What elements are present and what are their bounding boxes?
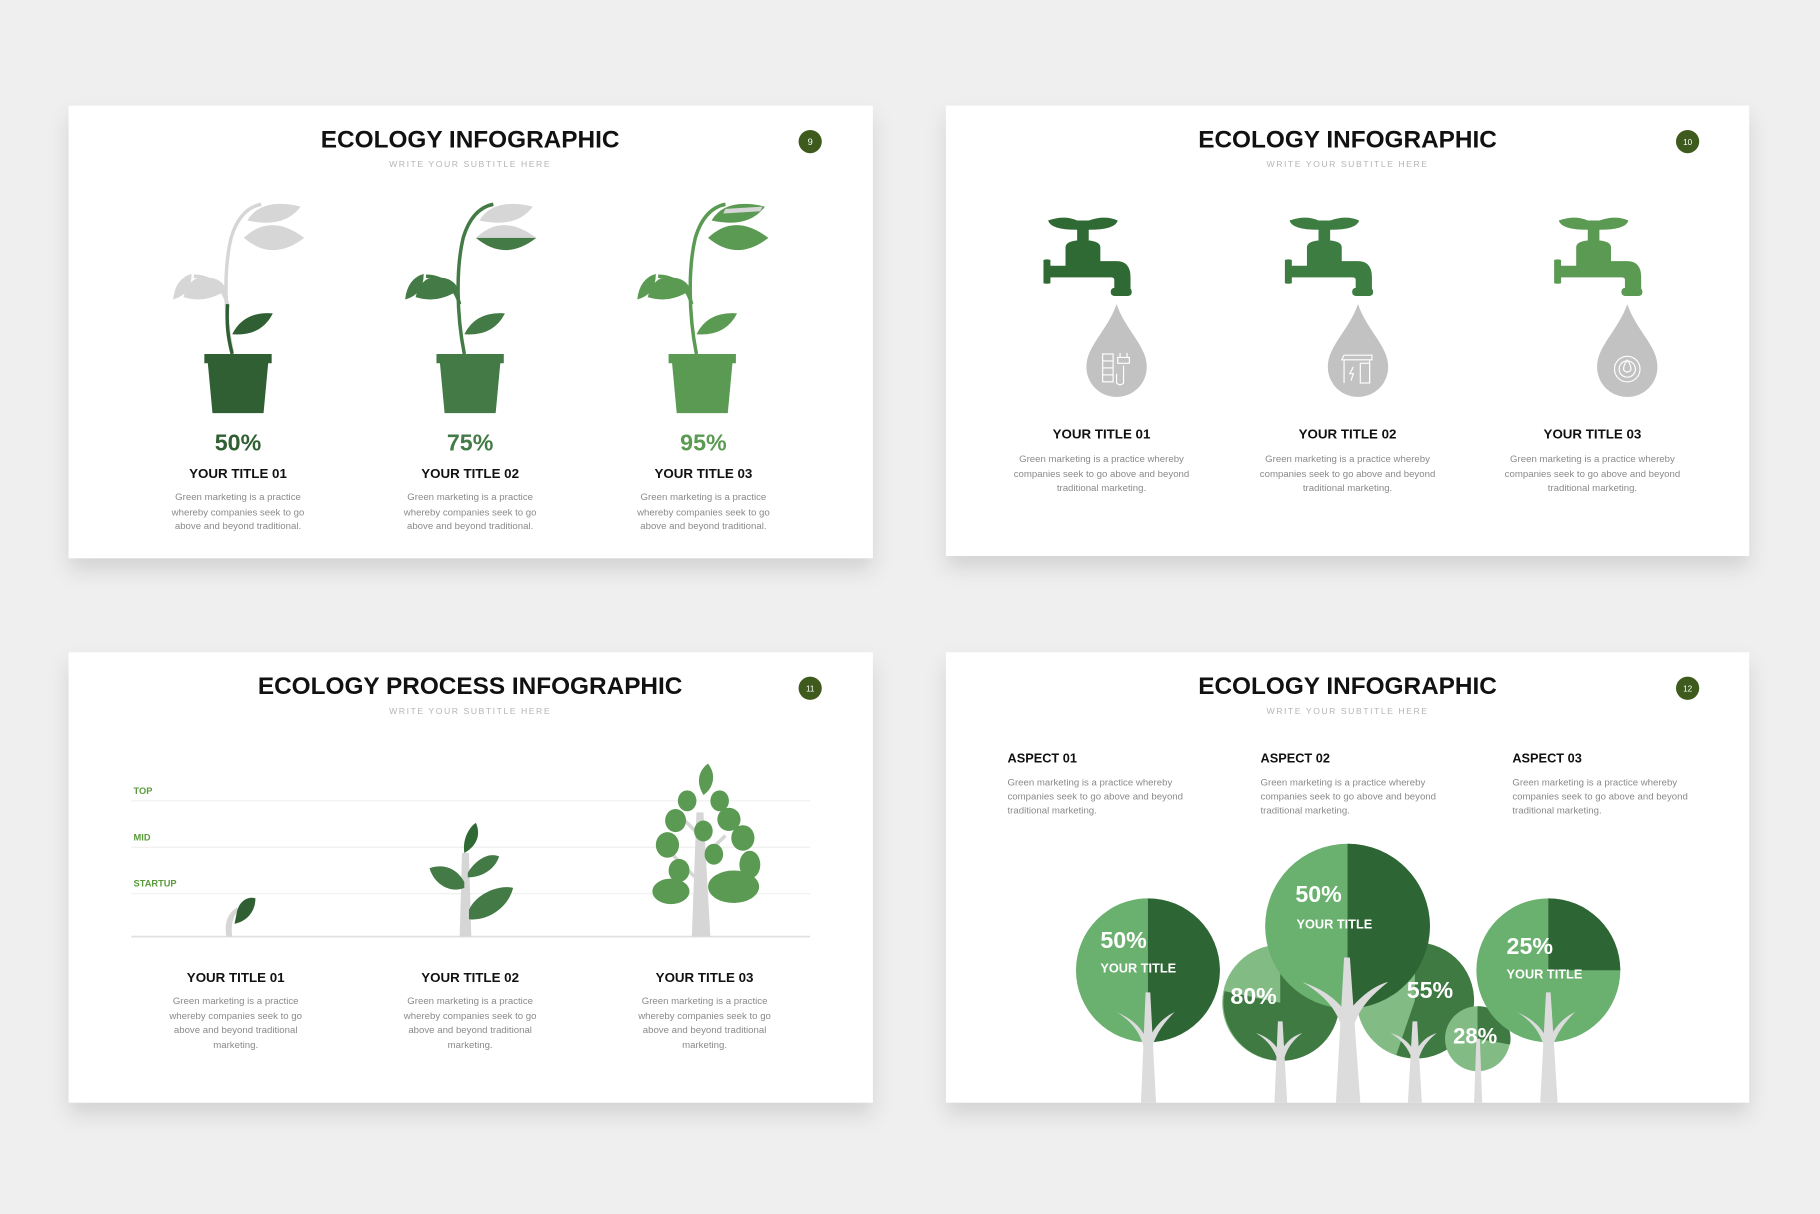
panel: tree pies — [946, 652, 1749, 1103]
stat 1 — [171, 429, 304, 532]
tap texts: YOUR TITLE 02 — [1299, 427, 1396, 442]
subtitle: WRITE YOUR SUBTITLE HERE — [1267, 706, 1429, 716]
plant 1 — [173, 204, 304, 413]
aspects: traditional marketing. — [1512, 806, 1602, 817]
process texts: above and beyond traditional — [408, 1025, 532, 1036]
tree pie 55% — [1357, 942, 1474, 1058]
pie labels: YOUR TITLE — [1296, 916, 1372, 931]
stat 1: 50% — [215, 429, 262, 455]
stat 2: above and beyond traditional. — [407, 521, 533, 532]
sprout 1 — [226, 898, 255, 937]
panel: taps — [946, 106, 1749, 556]
page badge 12: 12 — [1683, 685, 1693, 694]
page badge 9: 9 — [808, 137, 813, 147]
tap texts: traditional marketing. — [1057, 483, 1146, 494]
aspects: traditional marketing. — [1261, 806, 1350, 817]
stat 3: 95% — [680, 429, 727, 455]
tap 1 with drop — [1043, 218, 1147, 397]
pie labels: YOUR TITLE — [1100, 961, 1176, 976]
tree pie 25% — [1476, 898, 1620, 1042]
stat 2: Green marketing is a practice — [407, 492, 533, 503]
pie labels: YOUR TITLE — [1507, 966, 1582, 981]
page badge 9 — [799, 130, 822, 153]
tap texts: traditional marketing. — [1548, 483, 1637, 494]
stat 1: above and beyond traditional. — [175, 521, 301, 532]
tree pie 50% big — [1265, 844, 1430, 1009]
tree pie 80% — [1222, 945, 1339, 1061]
tap 3 with drop — [1554, 218, 1657, 397]
level labels: STARTUP — [134, 879, 177, 889]
tap texts: companies seek to go above and beyond — [1260, 469, 1435, 480]
sprout 2 — [430, 823, 513, 937]
pie labels: 50% — [1100, 927, 1147, 953]
aspects: Green marketing is a practice whereby — [1512, 778, 1677, 789]
level labels — [134, 786, 177, 889]
aspects: traditional marketing. — [1007, 806, 1097, 817]
stat 3: Green marketing is a practice — [641, 492, 766, 503]
process texts: YOUR TITLE 01 — [187, 970, 285, 985]
aspects: ASPECT 01 — [1007, 751, 1077, 766]
page badge 10 — [1676, 130, 1699, 153]
panel: plant growth — [69, 106, 873, 558]
tap texts — [1014, 427, 1680, 494]
level labels: TOP — [134, 786, 152, 796]
aspects — [1007, 751, 1688, 817]
process texts: marketing. — [448, 1040, 493, 1051]
tap texts: traditional marketing. — [1303, 483, 1392, 494]
aspects: Green marketing is a practice whereby — [1007, 778, 1172, 789]
process texts: marketing. — [213, 1040, 258, 1051]
stat 1: whereby companies seek to go — [171, 507, 304, 518]
aspects: Green marketing is a practice whereby — [1261, 778, 1425, 789]
tree pie 28% — [1445, 1006, 1511, 1071]
process texts: Green marketing is a practice — [173, 996, 299, 1007]
panel: process — [69, 652, 873, 1103]
level labels: MID — [134, 832, 151, 842]
pie labels — [1100, 881, 1582, 1048]
pie labels: 28% — [1453, 1023, 1498, 1048]
trunks — [1117, 958, 1575, 1103]
pie labels: 80% — [1230, 983, 1277, 1009]
tap texts: companies seek to go above and beyond — [1014, 469, 1189, 480]
title: ECOLOGY INFOGRAPHIC — [1198, 126, 1497, 153]
tap texts: companies seek to go above and beyond — [1505, 469, 1680, 480]
page badge 10: 10 — [1683, 138, 1693, 147]
process texts: Green marketing is a practice — [407, 996, 533, 1007]
tree 3 — [652, 764, 760, 937]
process texts: whereby companies seek to go — [637, 1011, 771, 1022]
aspects: ASPECT 02 — [1261, 751, 1330, 766]
process texts: whereby companies seek to go — [403, 1011, 536, 1022]
stat 2: YOUR TITLE 02 — [421, 466, 519, 481]
stat 2: 75% — [447, 429, 494, 455]
subtitle: WRITE YOUR SUBTITLE HERE — [1267, 159, 1429, 169]
tap texts: YOUR TITLE 01 — [1053, 427, 1151, 442]
pie labels: 25% — [1507, 933, 1553, 959]
subtitle: WRITE YOUR SUBTITLE HERE — [389, 706, 551, 716]
page badge 12 — [1676, 677, 1699, 700]
aspects: companies seek to go above and beyond — [1512, 792, 1688, 803]
title: ECOLOGY INFOGRAPHIC — [321, 126, 619, 153]
title: ECOLOGY PROCESS INFOGRAPHIC — [258, 673, 682, 700]
pie labels: 55% — [1407, 977, 1454, 1003]
process texts: Green marketing is a practice — [642, 996, 767, 1007]
stat 3: above and beyond traditional. — [640, 521, 767, 532]
process texts: marketing. — [682, 1040, 727, 1051]
process texts — [168, 970, 771, 1051]
stat 1: YOUR TITLE 01 — [189, 466, 287, 481]
tree pie 50% left — [1076, 898, 1220, 1042]
subtitle: WRITE YOUR SUBTITLE HERE — [389, 159, 551, 169]
plant 3 — [637, 204, 768, 413]
pie labels: 50% — [1295, 881, 1342, 907]
process texts: YOUR TITLE 02 — [421, 970, 519, 985]
stat 3: whereby companies seek to go — [636, 507, 770, 518]
process texts: above and beyond traditional — [174, 1025, 297, 1036]
aspects: companies seek to go above and beyond — [1261, 792, 1436, 803]
stat 3: YOUR TITLE 03 — [655, 466, 752, 481]
stat 1: Green marketing is a practice — [175, 492, 301, 503]
process texts: above and beyond traditional — [643, 1025, 766, 1036]
tap texts: YOUR TITLE 03 — [1544, 427, 1641, 442]
tap texts: Green marketing is a practice whereby — [1265, 454, 1430, 465]
process texts: whereby companies seek to go — [168, 1011, 302, 1022]
stat 2 — [403, 429, 536, 532]
page badge 11: 11 — [806, 685, 815, 694]
stat 2: whereby companies seek to go — [403, 507, 536, 518]
process texts: YOUR TITLE 03 — [656, 970, 753, 985]
tap texts: Green marketing is a practice whereby — [1019, 454, 1184, 465]
aspects: companies seek to go above and beyond — [1007, 792, 1183, 803]
tap texts: Green marketing is a practice whereby — [1510, 454, 1675, 465]
aspects: ASPECT 03 — [1512, 751, 1582, 766]
page badge 11 — [799, 677, 822, 700]
plant 2 — [405, 204, 536, 413]
tap 2 with drop — [1285, 218, 1388, 397]
stat 3 — [636, 429, 770, 532]
title: ECOLOGY INFOGRAPHIC — [1198, 673, 1497, 700]
